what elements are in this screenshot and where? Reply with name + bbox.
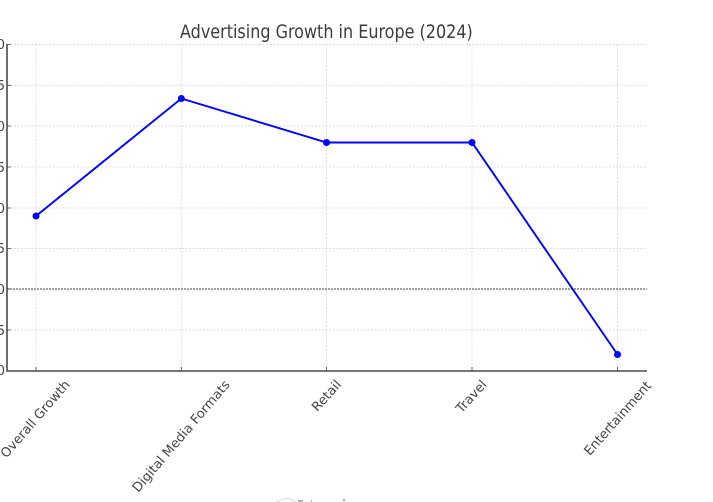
- x axis category labels: Overall Growth: [0, 378, 74, 461]
- x axis category labels: Entertainment: [582, 379, 655, 459]
- title: Advertising Growth in Europe (2024): [180, 21, 473, 42]
- x axis category labels: [0, 378, 655, 496]
- y axis tick labels (clipped at the left edge): [0, 38, 5, 379]
- chart axes: [7, 44, 647, 371]
- x axis category labels: Digital Media Formats: [130, 378, 234, 496]
- clipped logo fragment at the bottom edge: [277, 498, 345, 502]
- x axis category labels: Travel: [453, 378, 490, 417]
- reference line at zero growth: [7, 288, 647, 290]
- data line with markers: [32, 95, 621, 358]
- x axis category labels: Retail: [309, 378, 345, 415]
